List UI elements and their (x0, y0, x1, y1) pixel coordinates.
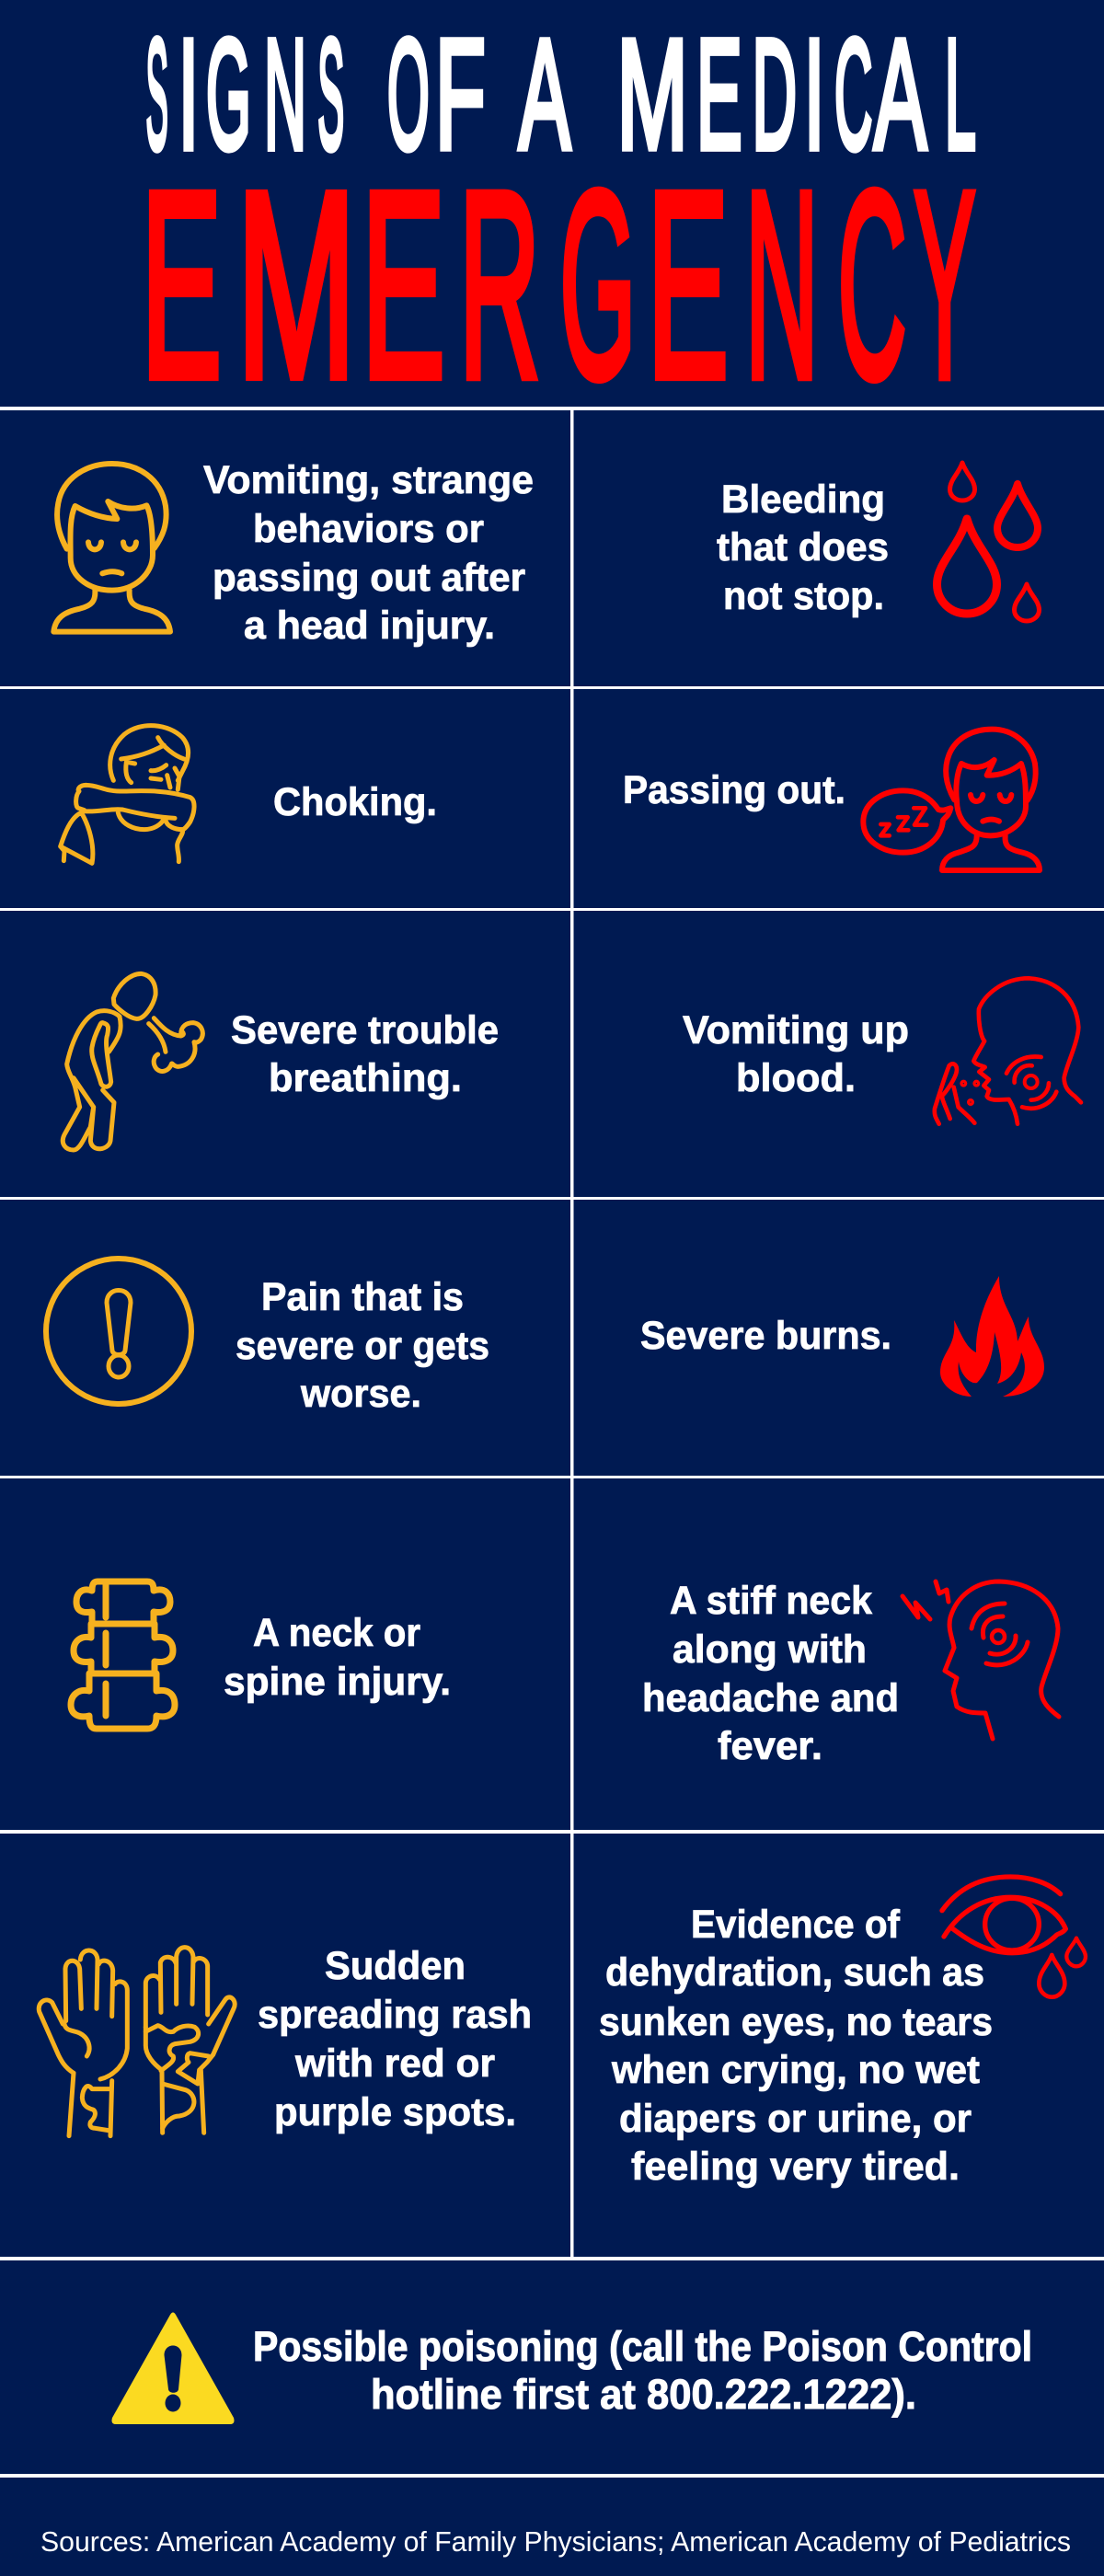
sources: Sources: American Academy of Family Physicians; American Academy of Pediatrics (40, 2525, 1071, 2558)
title: signs of a medical: I (804, 8, 824, 182)
icon: head profile with hand (935, 978, 1081, 1124)
icon: exclamation in circle (46, 1259, 191, 1404)
title: emergency: R (459, 137, 540, 432)
panel: poisoning (112, 2313, 1032, 2424)
title: signs of a medical: S (146, 8, 168, 182)
text: bleeding (717, 477, 889, 618)
panel: rash (39, 1944, 532, 2136)
title: emergency: C (838, 136, 906, 432)
text: poisoning (253, 2323, 1032, 2418)
text: head injury: Vomiting, strange (203, 458, 534, 502)
panel: bleeding (717, 463, 1040, 621)
title: signs of a medical: M (616, 7, 688, 182)
panel: vomiting blood (683, 978, 1081, 1124)
icon: eye with tears (942, 1877, 1086, 1997)
text: rash: Sudden (325, 1944, 466, 1988)
title: signs of a medical: G (206, 7, 251, 182)
title: signs of a medical: E (696, 6, 742, 181)
title: emergency: Y (914, 136, 975, 432)
text: head injury: behaviors or (253, 507, 484, 551)
text: rash: with red or (294, 2041, 495, 2086)
icon: person coughing into elbow (61, 726, 194, 863)
title: signs of a medical: C (834, 6, 872, 181)
text: vomiting blood: Vomiting up (683, 1008, 909, 1052)
panel: choking (61, 726, 437, 863)
panel: stiff neck (642, 1579, 1059, 1768)
title: signs of a medical: D (753, 7, 797, 182)
icon: spine vertebrae (71, 1581, 175, 1729)
title: emergency: E (142, 137, 222, 433)
text: neck or spine injury (224, 1611, 451, 1704)
text: trouble breathing: breathing. (269, 1056, 462, 1100)
title: emergency: E (647, 136, 729, 433)
title: signs of a medical: A (874, 6, 926, 182)
title: signs of a medical: A (519, 8, 570, 182)
panel: severe pain (46, 1259, 489, 1416)
icon: blood drops (937, 463, 1040, 621)
text: trouble breathing (231, 1008, 499, 1100)
text: vomiting blood (683, 1008, 909, 1100)
text: choking: Choking. (273, 780, 437, 824)
panel: head injury (53, 458, 534, 648)
title: signs of a medical: N (264, 8, 306, 182)
text: neck or spine injury: spine injury. (224, 1660, 451, 1704)
title: emergency: M (236, 137, 356, 433)
title: emergency: N (745, 138, 819, 433)
text: rash: purple spots. (274, 2090, 516, 2134)
text: stiff neck: along with (673, 1627, 867, 1672)
title: signs of a medical (146, 6, 976, 182)
text: stiff neck: headache and (642, 1676, 899, 1720)
text: bleeding: Bleeding (721, 477, 885, 522)
text: dehydration: dehydration, such as (605, 1950, 984, 1995)
text: bleeding: not stop. (723, 574, 884, 618)
text: passing out: Passing out. (623, 768, 845, 812)
text: severe burns: Severe burns. (640, 1314, 891, 1358)
title: signs of a medical: L (945, 7, 976, 182)
text: dehydration: when crying, no wet (611, 2048, 980, 2092)
text: poisoning: hotline first at 800.222.1222). (371, 2371, 916, 2418)
text: neck or spine injury: A neck or (253, 1611, 420, 1655)
panel: neck or spine injury (71, 1581, 451, 1729)
text: stiff neck: fever. (718, 1724, 822, 1768)
title: signs of a medical: I (178, 8, 199, 182)
icon: head with closed eyes (53, 464, 170, 632)
text: dehydration: Evidence of (691, 1903, 901, 1947)
text: severe pain: severe or gets (236, 1324, 489, 1368)
text: vomiting blood: blood. (736, 1056, 856, 1100)
text: severe pain: worse. (300, 1372, 421, 1416)
text: dehydration: sunken eyes, no tears (599, 2000, 993, 2044)
text: stiff neck: A stiff neck (670, 1579, 872, 1623)
title: signs of a medical: S (317, 8, 344, 182)
title: signs of a medical: F (435, 6, 486, 181)
panel: trouble breathing (63, 973, 499, 1150)
title: emergency: G (560, 137, 636, 432)
title: emergency (142, 136, 975, 433)
icon: sleeping head with speech bubble (863, 730, 1040, 870)
text: trouble breathing: Severe trouble (231, 1008, 499, 1052)
text: rash (258, 1944, 532, 2134)
icon: warning triangle (112, 2313, 234, 2424)
text: poisoning: Possible poisoning (call the Poison Control (253, 2323, 1032, 2370)
title: signs of a medical: O (387, 6, 430, 181)
panel: dehydration (599, 1877, 1086, 2189)
text: head injury: a head injury. (244, 604, 495, 648)
text: dehydration (599, 1903, 993, 2189)
title: emergency: E (362, 136, 445, 432)
text: dehydration: diapers or urine, or (619, 2097, 972, 2141)
text: head injury: passing out after (213, 556, 525, 600)
icon: head with pain rings and lightning (903, 1581, 1059, 1739)
icon: person bent over breathing (63, 973, 202, 1150)
icon: flame (940, 1276, 1044, 1397)
text: dehydration: feeling very tired. (631, 2145, 960, 2189)
text: stiff neck (642, 1579, 899, 1768)
text: rash: spreading rash (258, 1993, 532, 2037)
panel: severe burns (640, 1276, 1044, 1397)
text: head injury (203, 458, 534, 648)
text: bleeding: that does (717, 525, 889, 569)
icon: hands with rash (39, 1948, 235, 2136)
text: severe pain (236, 1275, 489, 1416)
text: severe pain: Pain that is (261, 1275, 464, 1319)
panel: passing out (623, 730, 1040, 870)
